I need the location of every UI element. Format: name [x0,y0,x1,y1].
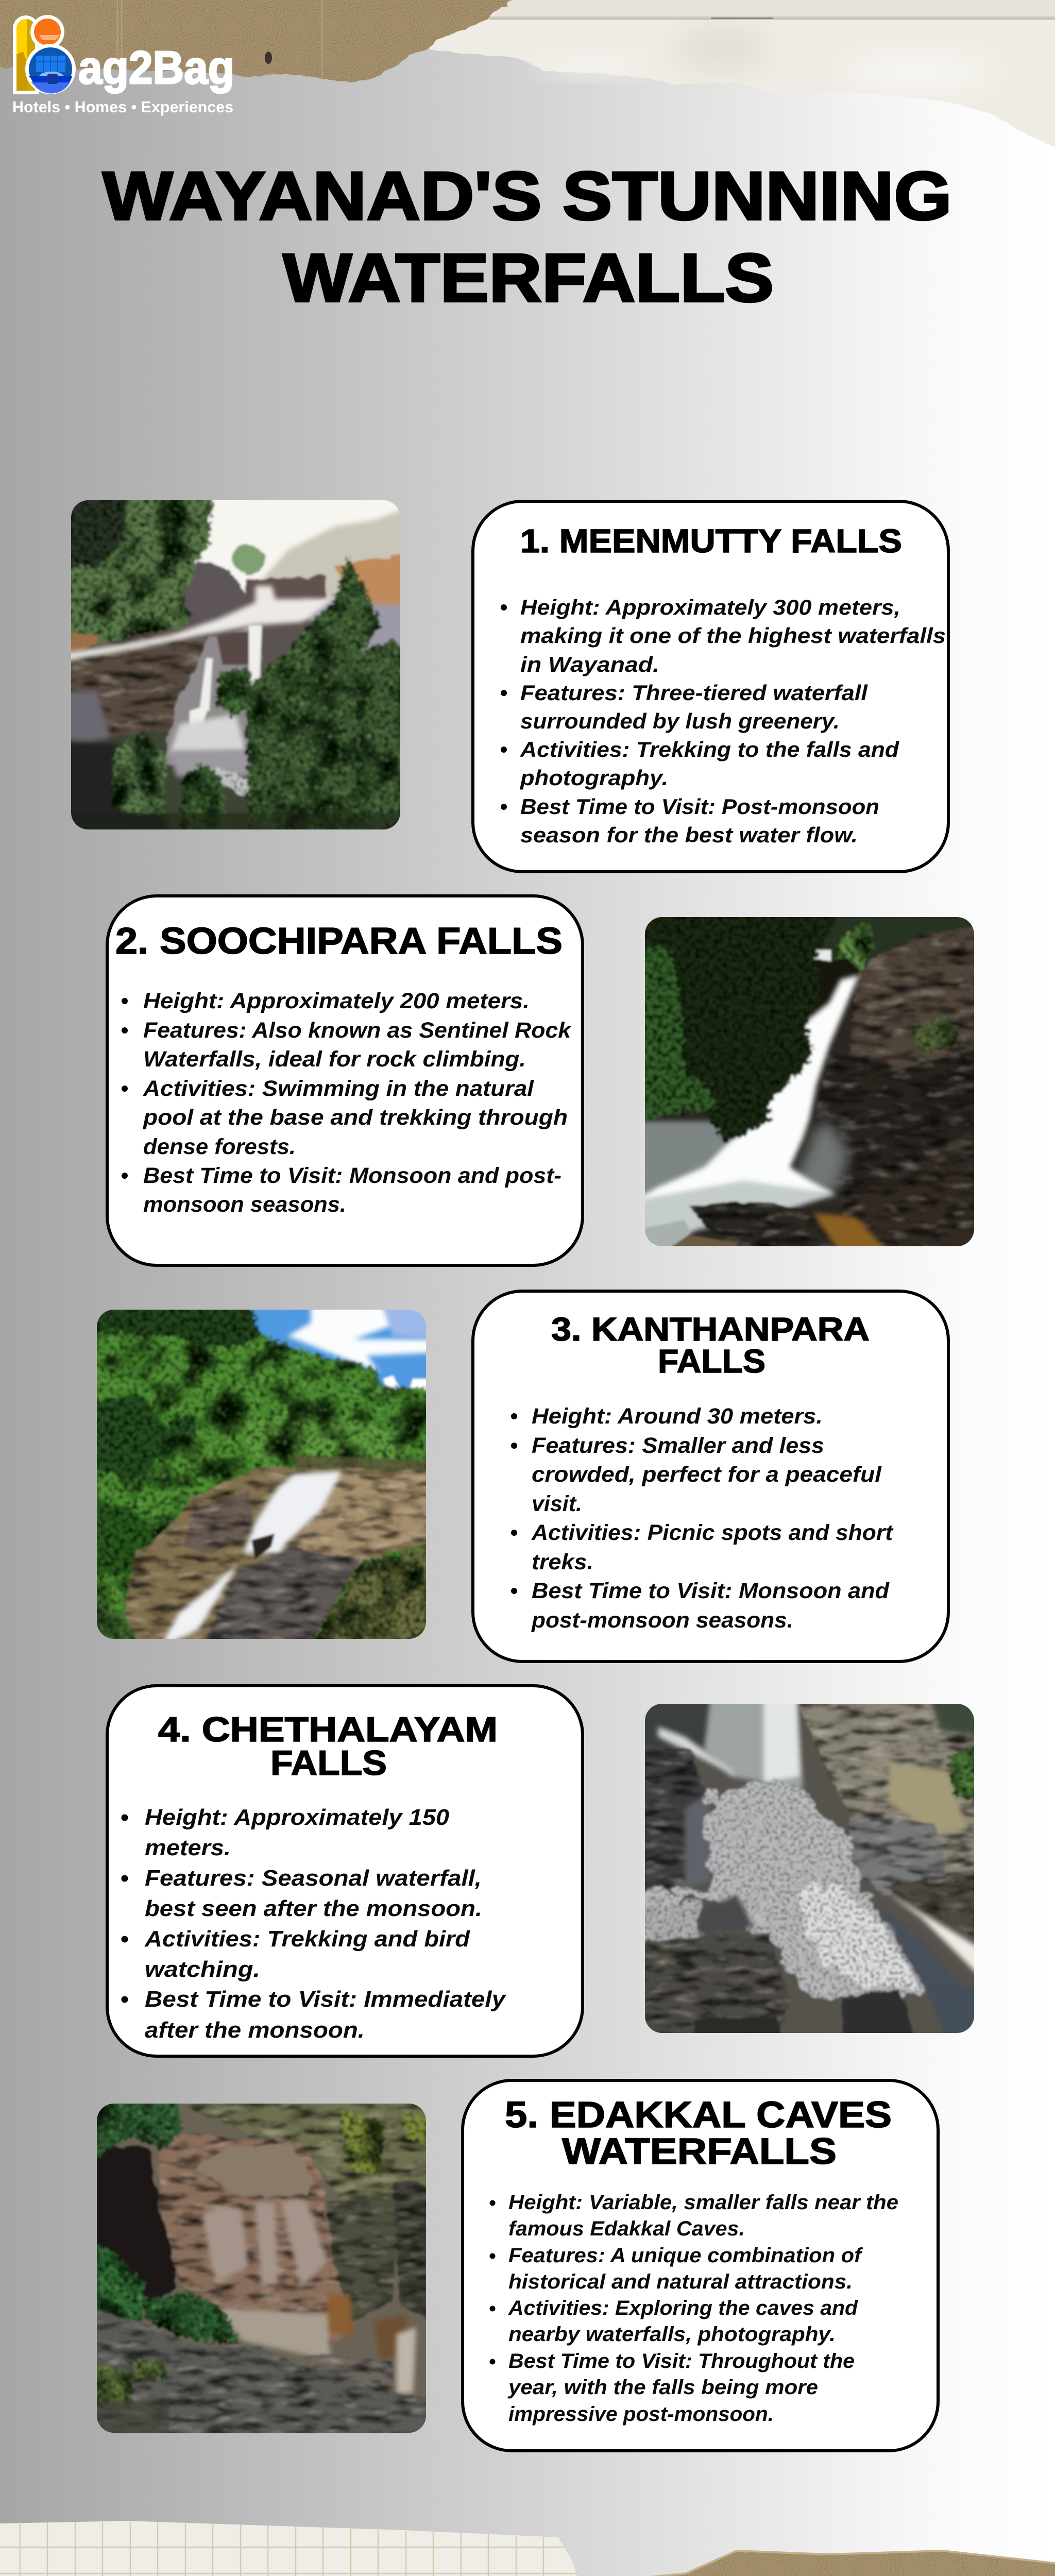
heading: 5. EDAKKAL CAVES [505,2095,892,2136]
bullet list: Height: Approximately 200 meters. [143,989,530,1013]
card background [473,1291,948,1662]
bullet list: Height: Approximately 150 [145,1805,450,1830]
heading: WATERFALLS [562,2131,837,2172]
card background [107,896,583,1265]
card 1: Meenmutty Falls [473,501,948,872]
heading: FALLS [658,1343,765,1380]
bullet list: after the monsoon. [145,2018,365,2043]
bullet list: historical and natural attractions. [508,2270,853,2293]
bullet list: nearby waterfalls, photography. [508,2323,836,2346]
bullet list: Best Time to Visit: Monsoon and [532,1579,890,1603]
bullet list: crowded, perfect for a peaceful [532,1462,882,1487]
heading [505,2095,892,2172]
torn cardboard header [0,0,512,82]
heading [158,1710,498,1783]
heading [551,1311,870,1380]
heading: 3. KANTHANPARA [551,1311,870,1348]
bullet list: Waterfalls, ideal for rock climbing. [143,1047,526,1072]
bullet list: Best Time to Visit: Throughout the [508,2350,855,2372]
bullet list: Activities: Trekking to the falls and [520,737,899,761]
card background [107,1686,583,2056]
bullet list: famous Edakkal Caves. [508,2217,745,2240]
bullet list: Best Time to Visit: Monsoon and post- [143,1163,561,1188]
bullet list: Activities: Swimming in the natural [143,1076,534,1101]
bullet list: year, with the falls being more [507,2376,818,2399]
bullet list: Features: Smaller and less [532,1433,824,1458]
bullet list: Features: A unique combination of [508,2244,863,2267]
bullet list [501,595,946,847]
photo: Chethalayam Falls [645,1704,974,2033]
bullet list: best seen after the monsoon. [145,1896,482,1921]
bullet list: Features: Three-tiered waterfall [520,681,868,705]
torn graph paper footer [0,2521,580,2576]
bullet list: season for the best water flow. [520,823,858,847]
bullet list: surrounded by lush greenery. [520,709,840,733]
heading: FALLS [270,1743,387,1783]
card 3: Kanthanpara Falls [473,1291,948,1662]
bullet list [122,1805,507,2043]
bullet list: photography. [520,766,668,790]
title: WAYANAD'S STUNNING [103,158,952,234]
bullet list [122,989,572,1217]
bullet list: Height: Approximately 300 meters, [520,595,900,619]
photo: Kanthanpara Falls [97,1310,426,1639]
bullet list: visit. [532,1492,582,1516]
bullet list: watching. [145,1957,260,1982]
heading: 1. MEENMUTTY FALLS [520,522,902,560]
logo tagline: Hotels • Homes • Experiences [12,98,233,116]
bullet list: in Wayanad. [520,652,659,676]
photo: Edakkal Caves [97,2104,426,2433]
bullet list: Best Time to Visit: Post-monsoon [520,794,879,819]
card background [473,501,948,872]
bullet list: Best Time to Visit: Immediately [145,1987,507,2012]
heading: 4. CHETHALAYAM [158,1710,498,1749]
bullet list: Features: Also known as Sentinel Rock [143,1018,572,1043]
card background [463,2080,938,2451]
bullet list: pool at the base and trekking through [143,1105,568,1130]
photo: Soochipara Falls [645,917,974,1246]
photo: Meenmutty Falls [71,500,400,829]
bullet list: making it one of the highest waterfalls [520,623,946,648]
card 2: Soochipara Falls [107,896,583,1265]
bullet list: impressive post-monsoon. [508,2403,774,2426]
bullet list: monsoon seasons. [143,1192,346,1217]
bullet list: Activities: Exploring the caves and [508,2297,859,2319]
bullet list: treks. [532,1550,593,1574]
logo: Bag2Bag [12,15,234,116]
torn cardboard footer [387,2551,1055,2576]
bullet list: dense forests. [143,1134,296,1159]
title [103,158,952,316]
card 4: Chethalayam Falls [107,1686,583,2056]
card 5: Edakkal Caves Waterfalls [463,2080,938,2451]
title: WATERFALLS [283,240,774,316]
bullet list: Activities: Trekking and bird [144,1926,470,1952]
logo wordmark: ag2Bag [78,42,234,94]
bullet list [511,1404,894,1633]
heading: 2. SOOCHIPARA FALLS [115,921,563,962]
bullet list: Height: Around 30 meters. [532,1404,823,1429]
bullet list: Features: Seasonal waterfall, [145,1866,482,1891]
bullet list: post-monsoon seasons. [531,1608,793,1633]
bullet list [489,2191,898,2426]
torn paper header: white crumpled paper [412,0,1055,147]
icon: logo mark [13,15,76,94]
bullet list: Height: Variable, smaller falls near the [508,2191,898,2214]
bullet list: meters. [145,1835,231,1860]
bullet list: Activities: Picnic spots and short [531,1520,894,1545]
